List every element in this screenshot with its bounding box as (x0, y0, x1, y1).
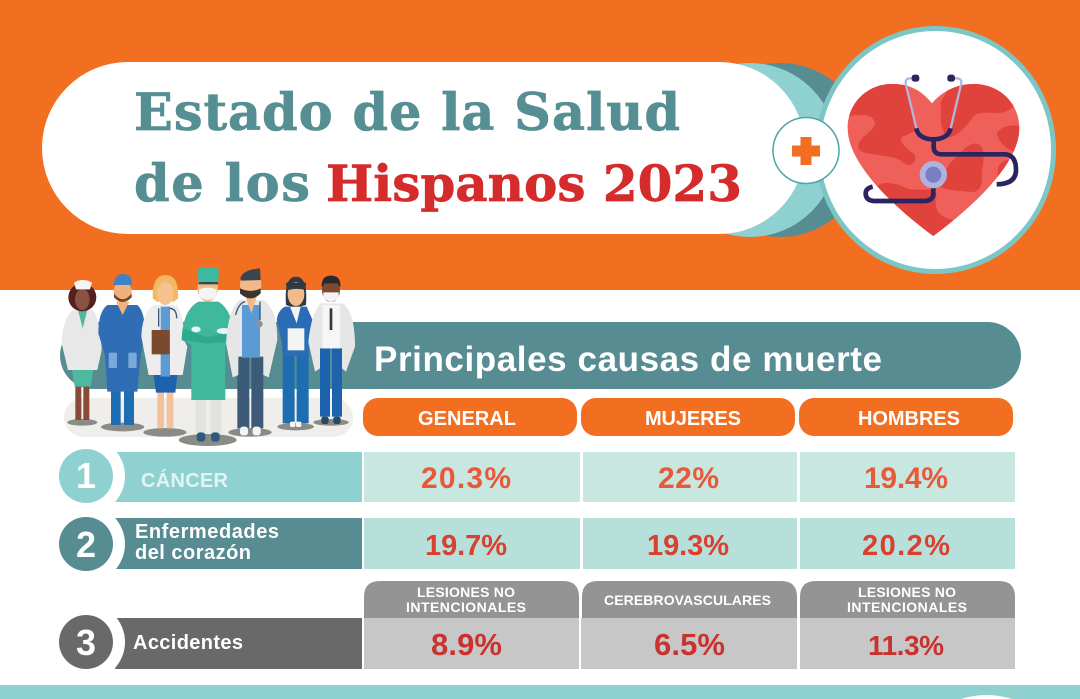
row 1 values: 20.3% (421, 462, 511, 495)
male doctor with stethoscope (226, 268, 277, 437)
row 3 column: men: INTENCIONALES (847, 599, 967, 615)
woman doctor with clipboard (141, 275, 187, 437)
row 1 values: 22% (658, 462, 719, 495)
illustration: medical staff (62, 267, 355, 446)
section heading bar: Principales causas de muerte (374, 340, 882, 379)
title text (134, 83, 742, 214)
row 3 column: women: 6.5% (654, 627, 725, 662)
title text: Hispanos 2023 (326, 154, 742, 213)
row 1 values: 19.4% (864, 462, 948, 495)
surgeon in blue (98, 274, 145, 431)
row 1 label: cancer: CÁNCER (141, 469, 229, 492)
row 3 label: accidents: 3 (76, 622, 96, 663)
row 3 column: general (364, 581, 579, 669)
section heading bar (60, 322, 1021, 389)
nurse (62, 280, 102, 426)
title banner (42, 62, 867, 237)
row 3 column: men: LESIONES NO (858, 584, 956, 600)
column pill: mujeres: MUJERES (645, 408, 741, 430)
row 2 label: heart disease: del corazón (135, 542, 251, 564)
woman nurse in blue (277, 277, 321, 430)
male doctor with mask (308, 276, 355, 426)
title text: de los (134, 154, 310, 214)
bottom teal band (0, 685, 1080, 699)
row 3 column: women: CEREBROVASCULARES (604, 592, 771, 608)
row 3 column: general: 8.9% (431, 627, 502, 662)
column pill: general (363, 398, 577, 436)
row 3 label: accidents: Accidentes (133, 632, 243, 654)
orange header background (0, 0, 1080, 290)
column pill: general: GENERAL (418, 408, 516, 430)
floor under medical staff (64, 398, 353, 437)
title text: Estado de la Salud (134, 83, 680, 143)
row 2 values: 19.3% (647, 530, 729, 562)
icon: heart with stethoscope (845, 75, 1023, 240)
row 3 column: men (800, 581, 1015, 669)
surgeon in green (179, 267, 237, 446)
row 2 values (364, 518, 1015, 569)
row 1 values (364, 452, 1015, 502)
row 2 label: heart disease: Enfermedades (135, 521, 279, 543)
row 1 label: cancer (47, 437, 362, 515)
plus badge (773, 118, 839, 184)
row 3 column: men: 11.3% (868, 630, 944, 661)
row 3 column: general: INTENCIONALES (406, 599, 526, 615)
row 2 label: heart disease (47, 505, 362, 583)
row 3 label: accidents (47, 603, 362, 681)
stethoscope (866, 75, 1016, 201)
column pill: mujeres (581, 398, 795, 436)
row 2 values: 20.2% (862, 530, 950, 562)
row 3 column: general: LESIONES NO (417, 584, 515, 600)
row 1 label: cancer: 1 (76, 455, 96, 496)
heart circle badge (818, 28, 1054, 272)
row 2 values: 19.7% (425, 530, 507, 562)
row 3 column: women (581, 581, 797, 669)
column pill: hombres (799, 398, 1013, 436)
row 2 label: heart disease: 2 (76, 524, 96, 565)
column pill: hombres: HOMBRES (858, 408, 960, 430)
